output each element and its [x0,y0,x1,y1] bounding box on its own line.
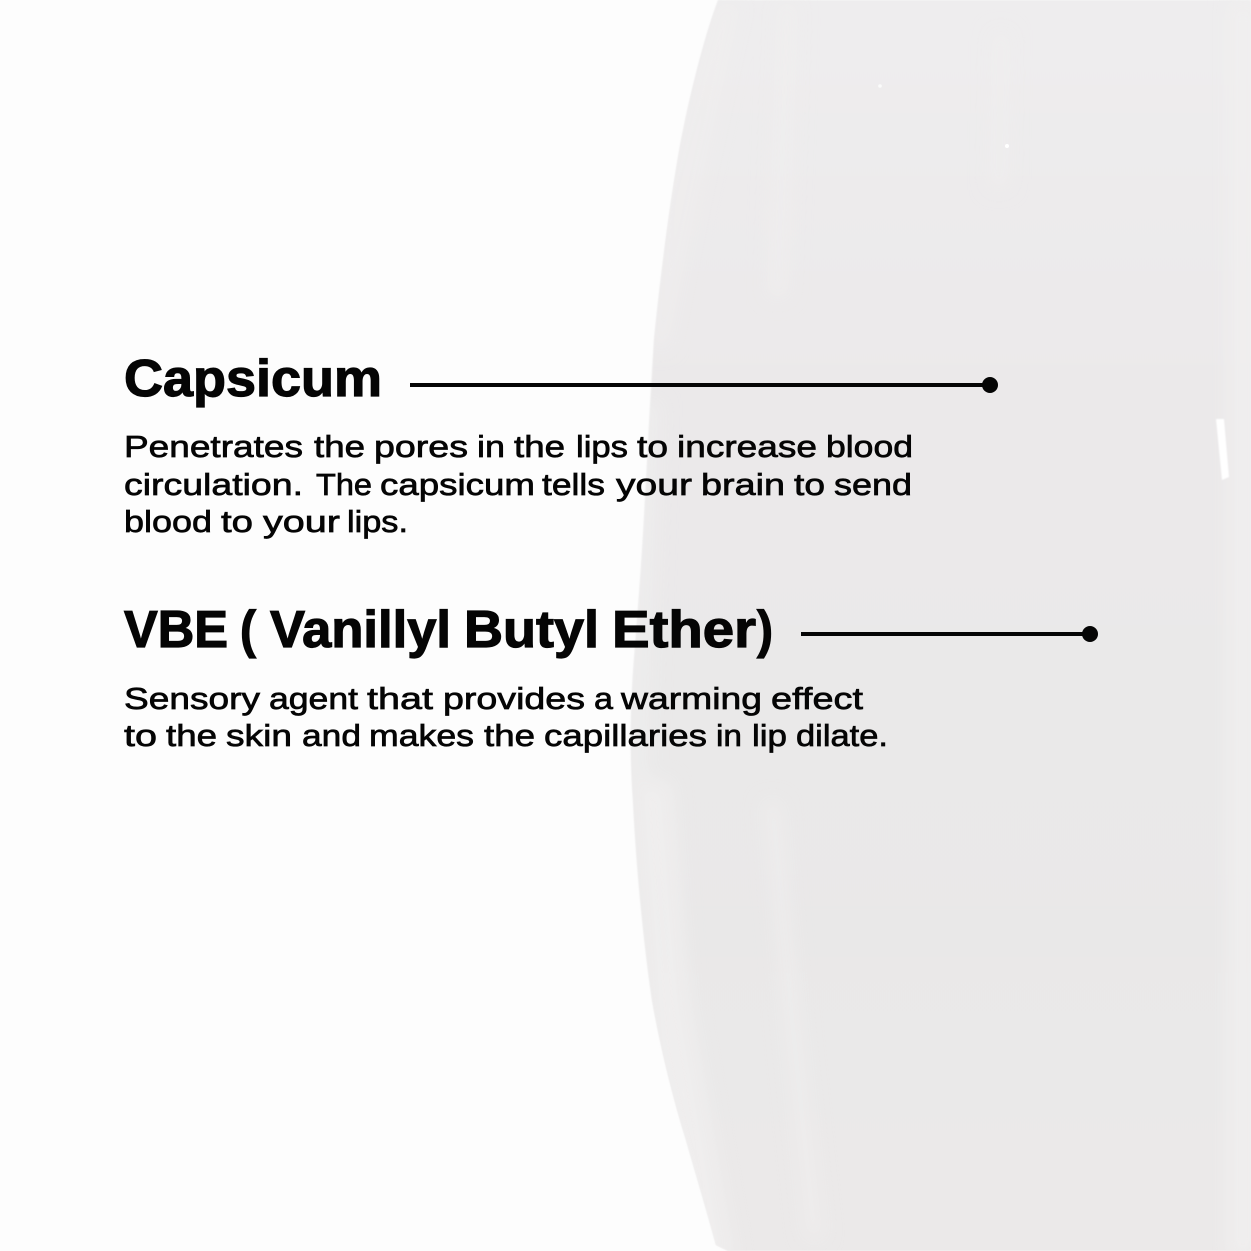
description: vbe [124,681,888,753]
description: capsicum: your [263,504,340,539]
description: capsicum [124,429,913,539]
description: capsicum: increase [677,429,817,464]
connector line: capsicum [410,377,998,393]
lip balm swatch [620,0,1251,1251]
section: capsicum [124,350,998,539]
description: vbe: Sensory [124,681,261,716]
heading: vbe [124,601,773,659]
heading: vbe: ( [240,601,257,659]
section: vbe [124,601,1098,753]
description: vbe: warming [620,681,762,716]
heading: vbe: Ether [612,601,756,659]
description: capsicum: brain [701,467,785,502]
description: vbe: agent [269,681,358,716]
small speck [1005,144,1009,148]
description: capsicum: Penetrates [124,429,303,464]
description: vbe: the [166,718,217,753]
description: capsicum: the [514,429,565,464]
description: vbe: in [716,718,742,753]
connector line: vbe [801,626,1098,642]
description: capsicum: to [794,467,825,502]
description: capsicum: in [477,429,505,464]
description: capsicum: The [316,467,372,502]
description: capsicum: your [616,467,692,502]
description: vbe: the [484,718,535,753]
description: capsicum: pores [374,429,468,464]
description: capsicum: blood [124,504,212,539]
description: capsicum: send [834,467,912,502]
description: capsicum: the [314,429,365,464]
heading: vbe: Butyl [464,601,599,659]
description: vbe: a [594,681,614,716]
description: vbe: lip [752,718,787,753]
description: capsicum: lips. [347,504,408,539]
description: capsicum: to [221,504,253,539]
description: vbe: provides [443,681,585,716]
description: capsicum: to [637,429,668,464]
description: vbe: and [302,718,361,753]
description: capsicum: capsicum [380,467,535,502]
description: vbe: makes [369,718,474,753]
description: capsicum: lips [576,429,628,464]
heading: vbe: Vanillyl [270,601,451,659]
description: vbe: effect [771,681,863,716]
description: vbe: capillaries [544,718,707,753]
description: capsicum: tells [542,467,605,502]
description: capsicum: circulation. [124,467,303,502]
description: vbe: to [124,718,157,753]
glossy highlight [1216,419,1229,480]
small speck [878,84,882,88]
heading: capsicum: Capsicum [124,350,382,408]
description: vbe: that [367,681,433,716]
description: capsicum: blood [826,429,913,464]
description: vbe: dilate. [796,718,888,753]
heading: vbe: ) [757,601,773,659]
heading: vbe: VBE [124,601,228,659]
description: vbe: skin [226,718,292,753]
